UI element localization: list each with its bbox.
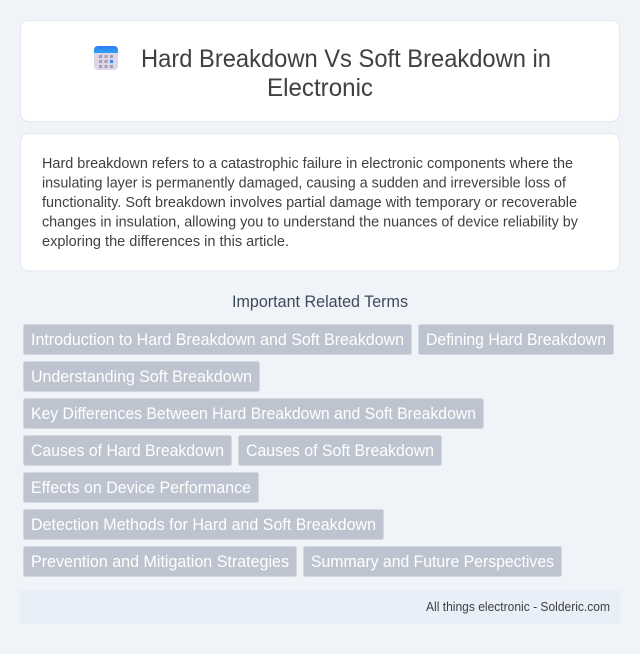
tag: understanding (24, 362, 260, 392)
tag: causes of soft (238, 436, 442, 466)
text block: description: insulating layer is permanently damaged, causing a sudden and irreversible loss of (42, 174, 567, 192)
tag: summary: Summary and Future Perspectives (311, 552, 554, 571)
tag: prevention: Prevention and Mitigation Strategies (31, 552, 289, 571)
tag: detection: Detection Methods for Hard and Soft Breakdown (31, 515, 376, 534)
tag: causes of soft: Causes of Soft Breakdown (246, 441, 434, 460)
title: Hard Breakdown Vs Soft Breakdown in (141, 45, 551, 73)
title (141, 45, 551, 102)
footer (20, 590, 620, 624)
text block: description (42, 155, 578, 250)
text block: description: functionality. Soft breakdown involves partial damage with temporary or recoverable (42, 194, 577, 211)
tag: causes of hard (24, 436, 232, 466)
tag: defining: Defining Hard Breakdown (426, 330, 606, 349)
tag: summary (304, 546, 562, 576)
tag: key differences (24, 398, 484, 428)
heading: related terms: Important Related Terms (232, 293, 408, 311)
tag: defining (418, 324, 614, 354)
text block: description: changes in insulation, allowing you to understand the nuances of device reliability by (42, 214, 578, 230)
tag: detection (24, 510, 384, 540)
tag: introduction (24, 324, 412, 354)
panel: related term tags (24, 324, 614, 576)
panel: title card (20, 20, 620, 122)
title: Electronic (267, 74, 373, 102)
footer: All things electronic - Solderic.com (426, 600, 610, 614)
icon: calendar (94, 46, 118, 70)
panel: description (20, 134, 620, 271)
tag: causes of hard: Causes of Hard Breakdown (31, 441, 224, 460)
text block: description: exploring the differences in this article. (42, 233, 289, 250)
tag: understanding: Understanding Soft Breakdown (31, 367, 252, 386)
tag: key differences: Key Differences Between Hard Breakdown and Soft Breakdown (31, 404, 476, 423)
text block: description: Hard breakdown refers to a catastrophic failure in electronic components where the (42, 155, 573, 172)
tag: prevention (24, 546, 296, 576)
tag: effects (24, 472, 258, 502)
tag: introduction: Introduction to Hard Breakdown and Soft Breakdown (31, 330, 404, 349)
tag: effects: Effects on Device Performance (31, 478, 251, 497)
